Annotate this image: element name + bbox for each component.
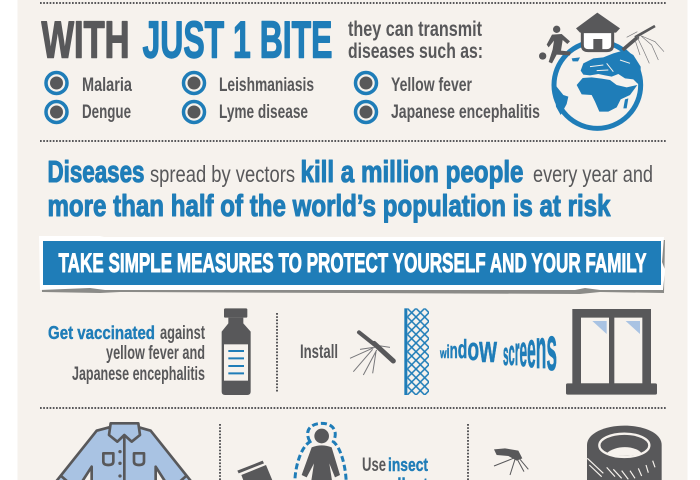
mesh	[404, 308, 429, 395]
text: window screens	[439, 315, 557, 384]
bullet: dengue	[46, 101, 131, 123]
text: they can transmit diseases such as: they can transmit	[348, 18, 482, 41]
heading: with just 1 bite: JUST 1 BITE	[142, 12, 332, 70]
icon: window screen with mosquito	[350, 308, 657, 395]
text: window screens: e	[520, 327, 527, 376]
bullet: yellow fever	[356, 72, 472, 96]
bullet: malaria: Malaria	[82, 74, 132, 96]
bullet: leishmaniasis: Leishmaniasis	[219, 74, 314, 96]
bullet: leishmaniasis	[184, 72, 314, 96]
text: window screens: o	[467, 331, 479, 367]
text: use insect repellent: insect	[388, 455, 428, 475]
icon: small mosquito	[494, 448, 528, 475]
heading: with just 1 bite	[42, 12, 332, 70]
text: window screens: wind	[440, 334, 474, 364]
bullet: yellow fever: Yellow fever	[391, 74, 472, 96]
globe	[554, 42, 641, 128]
heading: with just 1 bite: WITH	[42, 12, 130, 70]
icon: globe with hut, person and mosquito	[539, 13, 664, 128]
text: window screens: scr	[503, 330, 530, 374]
text: get vaccinated: Japanese encephalitis	[72, 364, 205, 385]
icon: repellent tube	[237, 461, 283, 480]
text: use insect repellent: Use	[362, 455, 386, 476]
bullet: japanese encephalitis	[356, 101, 540, 123]
text: use insect repellent	[362, 455, 428, 480]
text: window screens: n	[536, 317, 546, 380]
bullet: malaria	[46, 72, 132, 96]
text: diseases spread by vectors: spread by vectors	[150, 161, 295, 187]
person	[539, 26, 571, 63]
icon: long-sleeved shirt	[47, 423, 201, 480]
hut	[576, 13, 620, 51]
bullet: dengue: Dengue	[82, 101, 131, 123]
text: get vaccinated: yellow fever and	[106, 343, 205, 364]
list: diseases	[46, 72, 540, 123]
mosquito	[350, 332, 393, 375]
text: window screens: e	[527, 322, 536, 378]
text: window screens: w	[479, 329, 497, 371]
bullet: lyme disease: Lyme disease	[219, 101, 308, 123]
banner: take simple measures	[39, 236, 665, 294]
bullet: japanese encephalitis: Japanese encephalitis	[391, 101, 540, 123]
text: they can transmit diseases such as: diseases such as:	[348, 40, 483, 63]
text: install: Install	[300, 342, 338, 363]
mosquito	[623, 26, 664, 63]
text: s	[546, 315, 557, 384]
window	[566, 309, 657, 395]
text: diseases spread by vectors: Diseases	[48, 154, 144, 189]
text: diseases spread by vectors: kill a million people	[300, 154, 524, 189]
icon: vaccine bottle	[222, 308, 251, 395]
text: get vaccinated: Get vaccinated	[48, 323, 155, 343]
text: diseases spread by vectors: every year and	[533, 161, 653, 187]
text: they can transmit diseases such as	[348, 18, 483, 63]
text: get vaccinated: against	[160, 323, 205, 344]
icon: person with protective outline	[295, 423, 346, 480]
bullet: lyme disease	[184, 101, 308, 123]
text: get vaccinated	[48, 323, 205, 385]
text: diseases spread by vectors	[48, 154, 653, 223]
icon: tire	[587, 426, 662, 480]
